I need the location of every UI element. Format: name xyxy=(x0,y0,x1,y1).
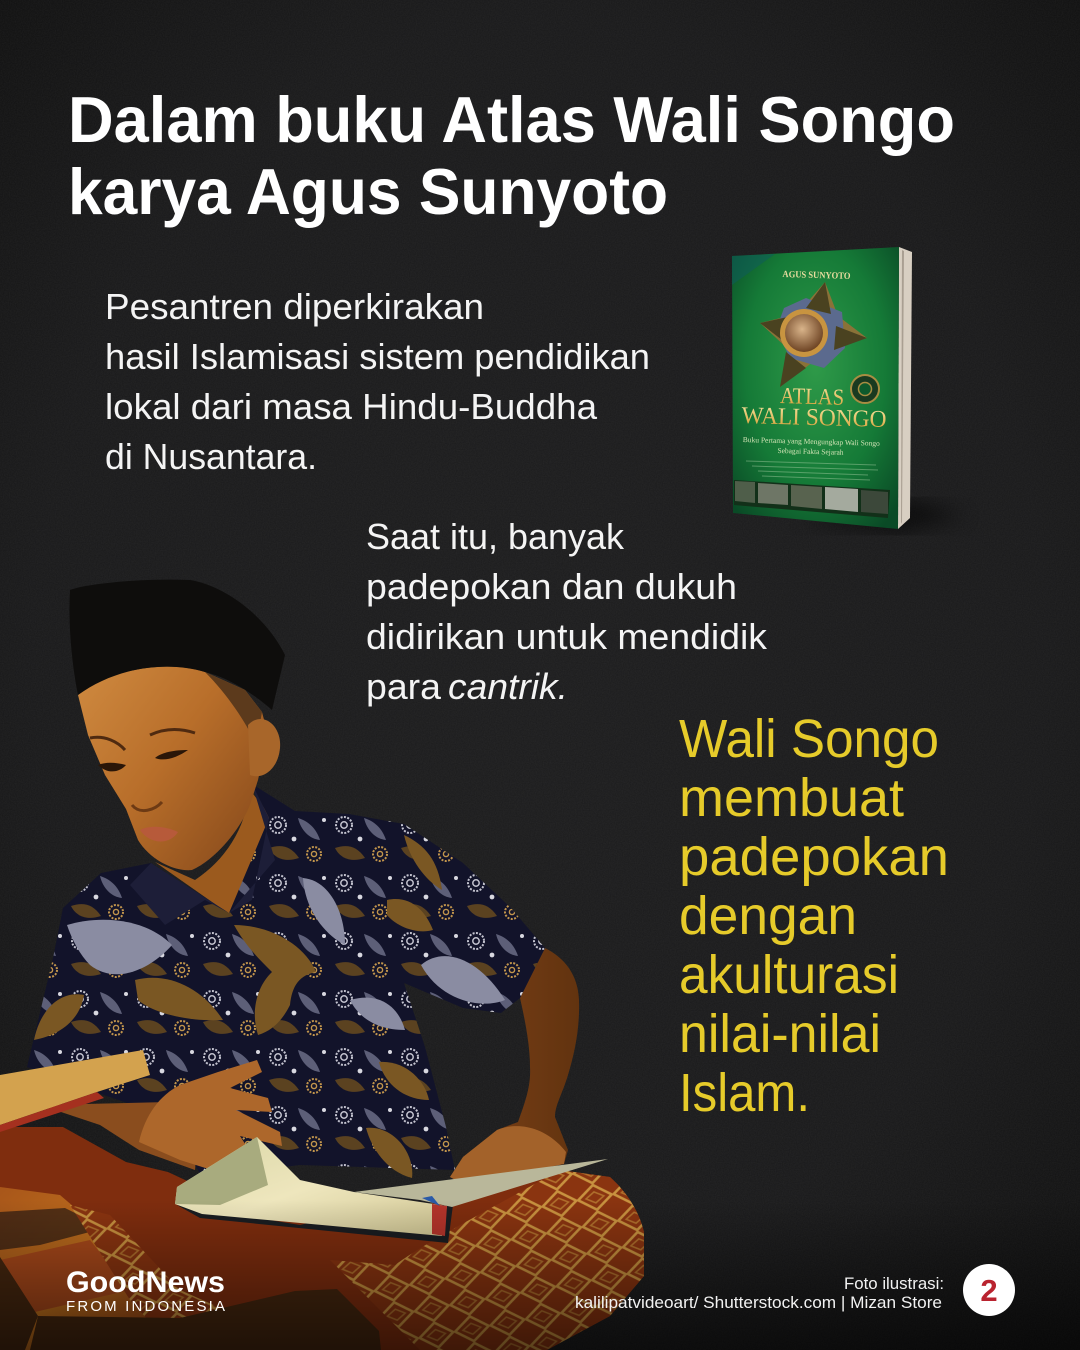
text block: pesantren: di Nusantara. xyxy=(105,436,317,477)
bottom dark fade xyxy=(0,1200,1080,1350)
title xyxy=(68,83,955,228)
cover text xyxy=(740,269,891,458)
left book xyxy=(0,1050,150,1125)
boy: face xyxy=(78,667,268,870)
cover text: ATLAS xyxy=(780,383,844,410)
boy: ear xyxy=(248,719,280,776)
boy: left forearm xyxy=(40,1102,200,1170)
callout: yellow text: membuat xyxy=(679,768,904,828)
cover seal xyxy=(851,375,879,403)
title: karya Agus Sunyoto xyxy=(68,155,668,228)
boy: right arm xyxy=(450,948,579,1184)
boy: black peci hat xyxy=(69,580,285,710)
boy: left hand xyxy=(139,1060,282,1188)
cover text: WALI SONGO xyxy=(741,403,887,433)
title: Dalam buku Atlas Wali Songo xyxy=(68,83,955,156)
open book xyxy=(175,1137,608,1243)
boy: batik shirt xyxy=(27,784,545,1177)
book: Atlas Wali Songo xyxy=(732,247,965,532)
text block: padepokan: cantrik. xyxy=(448,666,568,707)
cover text: Buku Pertama yang Mengungkap Wali Songo xyxy=(743,435,880,448)
cover star ornament xyxy=(760,282,867,387)
callout: yellow text: Islam. xyxy=(679,1063,810,1123)
logo: GoodNews from Indonesia: GoodNews xyxy=(66,1266,225,1299)
text block: padepokan: didirikan untuk mendidik xyxy=(366,616,768,657)
boy: eyes, brows, nose, lips xyxy=(90,729,195,842)
photo: boy reading xyxy=(0,580,644,1350)
text block: padepokan xyxy=(366,516,768,707)
text block: pesantren: hasil Islamisasi sistem pendidikan xyxy=(105,336,650,377)
text block: pesantren: lokal dari masa Hindu-Buddha xyxy=(105,386,598,427)
book cover xyxy=(732,247,899,529)
callout: yellow text: akulturasi xyxy=(679,945,899,1005)
page number badge xyxy=(963,1264,1015,1316)
sarong xyxy=(0,1127,644,1350)
text block: padepokan: Saat itu, banyak xyxy=(366,516,625,557)
photo credit: Foto ilustrasi: xyxy=(844,1274,944,1293)
sarong: plaid xyxy=(0,1187,170,1350)
callout: yellow text xyxy=(679,709,949,1123)
text block: padepokan: padepokan dan dukuh xyxy=(366,566,737,607)
callout: yellow text: padepokan xyxy=(679,827,949,887)
photo credit xyxy=(575,1274,944,1312)
callout: yellow text: dengan xyxy=(679,886,857,946)
cover blurb lines xyxy=(746,461,878,480)
shirt: large gold leaf motifs xyxy=(34,835,442,1178)
logo: GoodNews from Indonesia xyxy=(66,1266,225,1315)
text block: pesantren: Pesantren diperkirakan xyxy=(105,286,484,327)
text block: padepokan: para xyxy=(366,666,442,707)
photo credit: kalilipatvideoart/ Shutterstock.com | Mizan Store xyxy=(575,1293,942,1312)
book shadow xyxy=(800,500,965,532)
sarong: gold batik lattice xyxy=(330,1170,644,1350)
boy: foot xyxy=(30,1289,381,1350)
boy: neck xyxy=(155,790,272,916)
cover text: Sebagai Fakta Sejarah xyxy=(777,446,844,457)
cover photo strip xyxy=(734,480,890,518)
logo: GoodNews from Indonesia: FROM INDONESIA xyxy=(66,1298,225,1315)
shirt: silver leaf motifs xyxy=(67,878,505,1030)
shirt: collar xyxy=(130,784,275,925)
book pages xyxy=(898,247,912,529)
page number badge: 2 xyxy=(980,1273,998,1308)
text block: pesantren xyxy=(105,286,650,477)
callout: yellow text: Wali Songo xyxy=(679,709,939,769)
callout: yellow text: nilai-nilai xyxy=(679,1004,881,1064)
cover text: AGUS SUNYOTO xyxy=(782,270,851,282)
